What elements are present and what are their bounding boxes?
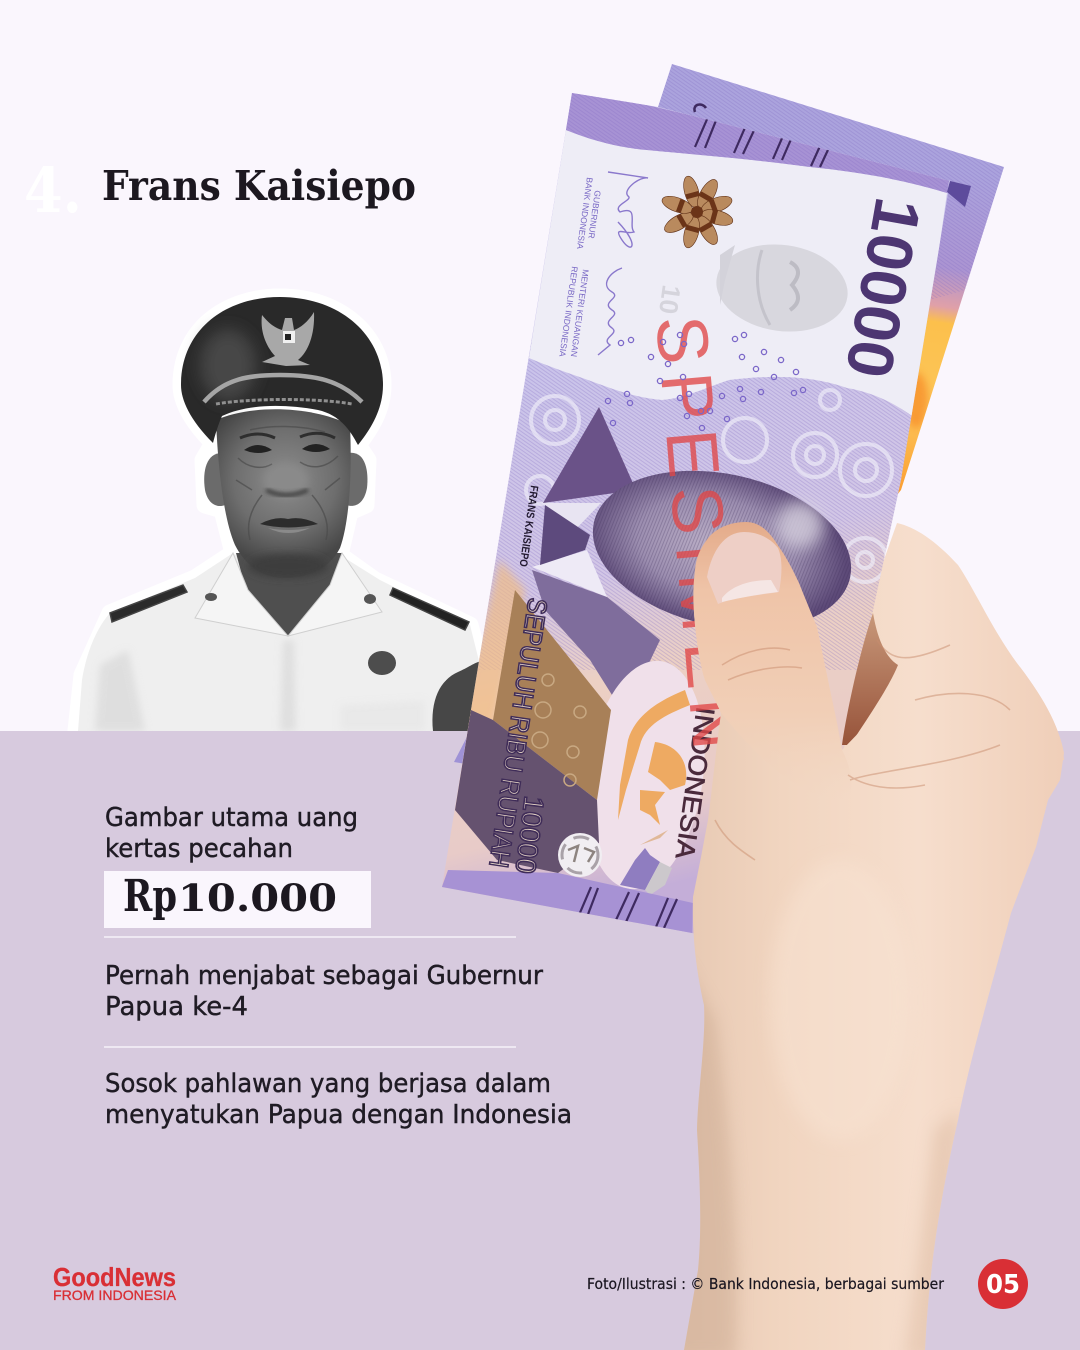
dark purple corner tab on back note (947, 181, 971, 207)
collar pins (205, 593, 376, 604)
forearm right shading (905, 1110, 960, 1350)
map small island (640, 830, 668, 845)
white watermark area (529, 130, 947, 418)
info block: governor (105, 961, 543, 1022)
shirt collar white (532, 550, 607, 597)
hand holding note (670, 522, 1064, 1350)
tie (540, 505, 590, 565)
caption: bank governor (557, 177, 603, 358)
thumb joint creases (715, 640, 1010, 860)
caption: bank governor: REPUBLIK INDONESIA (557, 266, 580, 358)
lavender guilloche texture (478, 340, 912, 670)
cap (181, 297, 383, 445)
info block: national hero (105, 1069, 572, 1130)
front banknote (442, 93, 950, 934)
logo: GoodNews from Indonesia: FROM INDONESIA (53, 1288, 176, 1303)
page number badge (978, 1259, 1028, 1309)
top bars (695, 117, 834, 167)
signature: governor (608, 172, 648, 247)
heading number: 4. (24, 154, 82, 227)
back of the hand: fingers behind the note (820, 523, 1064, 790)
caption: bank governor: BANK INDONESIA (575, 177, 595, 250)
top band (560, 85, 950, 193)
info block: governor: Pernah menjabat sebagai Gubernur (105, 961, 543, 991)
chest badge (368, 651, 396, 675)
portrait photo of Frans Kaisiepo (75, 297, 482, 740)
denomination box (104, 871, 371, 928)
background: lower panel (0, 731, 1080, 1350)
denomination label (123, 871, 337, 922)
back banknote (454, 64, 1004, 764)
shirt shading (96, 641, 296, 731)
top band texture (560, 85, 950, 193)
lower lip (268, 528, 310, 533)
collar upper white (542, 503, 601, 530)
country text: INDONESIA (670, 705, 721, 862)
gloved fist (432, 662, 482, 731)
cap band (204, 375, 362, 402)
hand shading (670, 860, 960, 1350)
denomination label: Rp (123, 871, 177, 922)
ears (204, 453, 367, 506)
brown triangle (493, 590, 611, 800)
bottom bars (579, 887, 677, 928)
face (216, 409, 351, 553)
cap light sheen (200, 329, 256, 401)
back note left sliver (454, 731, 480, 764)
watermark portrait: 10 (653, 283, 687, 316)
Garuda emblem (262, 312, 314, 366)
jacket lower panel (532, 570, 660, 695)
forearm left shading (670, 960, 736, 1350)
lower palm highlight (770, 860, 910, 1140)
right swirl motifs (526, 390, 892, 582)
heading: name: Frans Kaisiepo (102, 162, 416, 210)
brown motif rings (532, 674, 586, 786)
peach left glow (460, 560, 525, 740)
security dots (605, 332, 806, 431)
info block: banknote denomination (104, 803, 371, 928)
nostrils shadow (266, 490, 308, 495)
dark purple wedge (455, 710, 599, 873)
photo credit: Foto/Ilustrasi : © Bank Indonesia, berbagai sumber (587, 1275, 945, 1293)
left epaulet (110, 585, 187, 622)
dark jacket shoulder (543, 407, 636, 503)
chin shadow (248, 554, 328, 578)
nose (269, 464, 272, 466)
map islands orange (618, 690, 690, 825)
nail moon (722, 580, 778, 602)
mouth (260, 518, 318, 528)
neck (236, 553, 342, 636)
bottom band (440, 870, 693, 940)
line one: Gambar utama uang (105, 803, 358, 833)
collar (195, 553, 382, 636)
shadowed finger gap (842, 613, 898, 745)
page number badge: 05 (986, 1270, 1020, 1300)
logo: GoodNews from Indonesia (53, 1262, 176, 1303)
thumb nail (707, 532, 782, 604)
logo: GoodNews from Indonesia: GoodNews (53, 1262, 176, 1292)
info block: national hero: Sosok pahlawan yang berjasa dalam (105, 1069, 551, 1099)
right epaulet (390, 588, 469, 630)
denomination label: 10.000 (178, 876, 337, 920)
shirt (78, 553, 480, 731)
line two: kertas pecahan (105, 834, 293, 864)
name caption: FRANS KAISIEPO (517, 485, 540, 568)
thumb (693, 522, 851, 800)
seal (558, 833, 602, 877)
banknote portrait head (578, 448, 866, 652)
back note orange blotch (904, 372, 928, 428)
back note texture (658, 64, 1004, 300)
portrait white cut-out outline (75, 297, 482, 740)
denomination in words: SEPULUH RIBU RUPIAH (483, 596, 553, 870)
large denomination: 10000 (832, 193, 935, 383)
note base colour (442, 93, 950, 934)
palm and wrist (684, 613, 1064, 1350)
map background (572, 653, 718, 897)
portrait hatching (578, 448, 866, 652)
map grey landmass (645, 862, 672, 895)
info block: governor: Papua ke-4 (105, 992, 248, 1022)
info block: national hero: menyatukan Papua dengan Indonesia (105, 1100, 572, 1130)
map purple landmass (620, 848, 660, 890)
signature: minister (598, 268, 622, 355)
specimen overprint: SPESIMEN (640, 312, 758, 762)
face wrinkles (236, 426, 340, 540)
background: upper panel (0, 0, 1080, 731)
watermark portrait (660, 244, 848, 332)
caption: bank governor: MENTERI KEUANGAN (569, 269, 591, 358)
small denomination: 10000 (510, 794, 550, 875)
portrait highlight (776, 501, 824, 549)
flower emblem (660, 174, 735, 250)
cap embroidery (216, 400, 352, 404)
back note motif (694, 105, 706, 112)
eyes (240, 433, 335, 453)
caption: bank governor: GUBERNUR (586, 190, 603, 239)
